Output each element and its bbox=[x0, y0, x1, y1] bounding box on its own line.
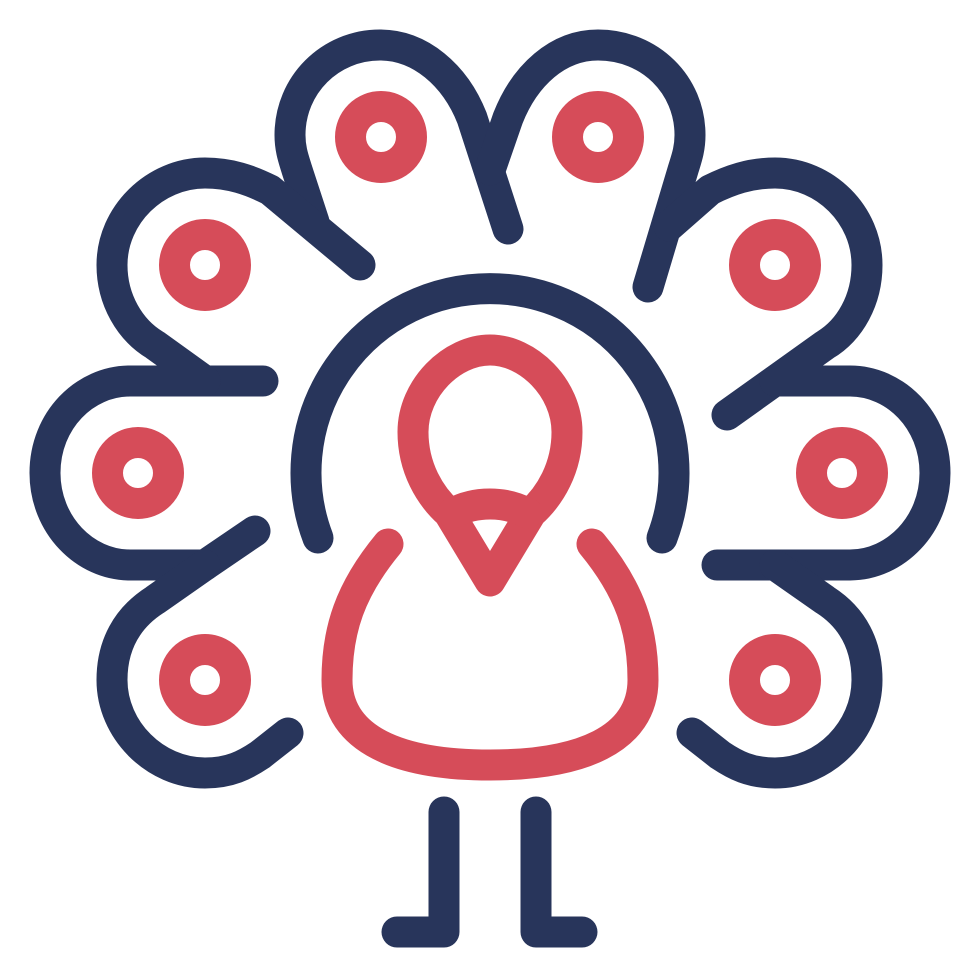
neck arch bbox=[306, 289, 674, 538]
feather: upper left bbox=[112, 173, 360, 381]
right leg bbox=[536, 812, 582, 932]
feather: top left bbox=[290, 45, 508, 229]
eye: lower left bbox=[174, 650, 236, 710]
feather: lower left bbox=[112, 565, 288, 773]
eye: lower right bbox=[744, 650, 806, 710]
feather: middle left bbox=[45, 381, 255, 565]
feather: top right bbox=[490, 45, 690, 287]
feather: lower right bbox=[692, 565, 867, 773]
feather: upper right bbox=[669, 173, 867, 415]
eye: middle left bbox=[108, 442, 168, 504]
feather: middle right bbox=[717, 381, 935, 565]
tail feathers bbox=[45, 45, 935, 773]
eye: upper left bbox=[174, 234, 236, 296]
eye: top left bbox=[350, 106, 412, 168]
eye: top right bbox=[568, 106, 628, 168]
head outline bbox=[413, 350, 567, 581]
eye: middle right bbox=[812, 442, 872, 504]
brow bbox=[453, 504, 527, 513]
left leg bbox=[397, 812, 444, 932]
head and beak bbox=[413, 350, 567, 581]
feather eyes bbox=[108, 106, 872, 710]
eye: upper right bbox=[744, 234, 806, 296]
body bbox=[337, 544, 643, 765]
legs bbox=[397, 812, 582, 932]
